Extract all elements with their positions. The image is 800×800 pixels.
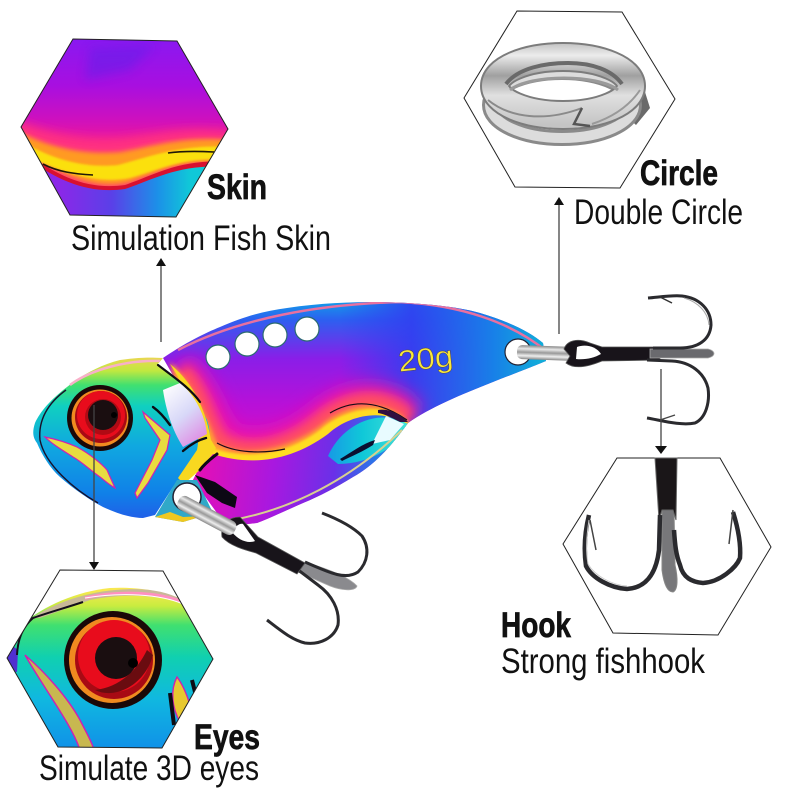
lure shoulder yellow stripe [170, 364, 216, 484]
rear treble hook [517, 296, 714, 424]
hook heading: Hook [501, 606, 571, 645]
lure gill flash [163, 383, 207, 447]
lure body [163, 302, 546, 524]
upper barb [305, 513, 367, 576]
lure [33, 295, 550, 535]
hook description: Strong fishhook [501, 642, 705, 681]
panel: eyes [5, 565, 260, 788]
hook hexagon [563, 458, 771, 635]
lure dark belly mark [195, 475, 237, 508]
lure fin holes [206, 317, 319, 369]
rear hook eye and shank [564, 340, 660, 367]
lure dark reflection [340, 440, 375, 461]
skin description: Simulation Fish Skin [71, 219, 331, 258]
eyes hexagon image [8, 588, 212, 748]
circle description: Double Circle [574, 193, 743, 232]
panel: circle [464, 11, 743, 232]
third barb rim [298, 562, 357, 590]
eyes heading: Eyes [194, 718, 260, 757]
icon: treble hook closeup [585, 458, 740, 592]
arrow: hook to hook panel [655, 369, 667, 454]
lure cheek marks [45, 412, 170, 498]
eyes hexagon outline [7, 570, 213, 748]
lure head left edge line [40, 390, 98, 503]
panel: skin [15, 38, 331, 258]
skin hexagon image [22, 40, 228, 216]
lure rear-top dark reflection [378, 410, 408, 422]
arrow: ring to circle [554, 197, 564, 334]
belly hook shank and eye [222, 517, 305, 574]
panel: hook [501, 458, 771, 681]
belly treble hook [175, 494, 367, 643]
arrow: lure eye to eyes panel [89, 405, 99, 570]
belly hook eye opening [232, 524, 255, 542]
skin heading: Skin [207, 168, 267, 207]
rear hook eye opening [576, 346, 601, 359]
upper barb [648, 296, 711, 348]
lure weight label: 20g [397, 340, 455, 379]
circle hexagon [464, 11, 675, 188]
lure head [33, 358, 210, 518]
lower barb [267, 566, 338, 643]
circle heading: Circle [640, 154, 718, 193]
lure tail eyelet [505, 339, 531, 365]
lure belly eyelet [155, 480, 213, 522]
arrow: skin to lure [156, 258, 166, 342]
lower barb [647, 360, 708, 424]
belly split ring [175, 494, 239, 537]
lure head top highlight [70, 361, 160, 385]
third barb rim [650, 349, 714, 358]
skin hexagon outline [21, 39, 228, 217]
lure eye [67, 385, 133, 451]
rear split ring [517, 345, 577, 361]
lure white reflection [372, 416, 404, 444]
lure wave dark lines [217, 404, 407, 452]
icon: split ring [488, 57, 650, 138]
lure gill lines [153, 365, 217, 470]
eyes description: Simulate 3D eyes [39, 749, 259, 788]
